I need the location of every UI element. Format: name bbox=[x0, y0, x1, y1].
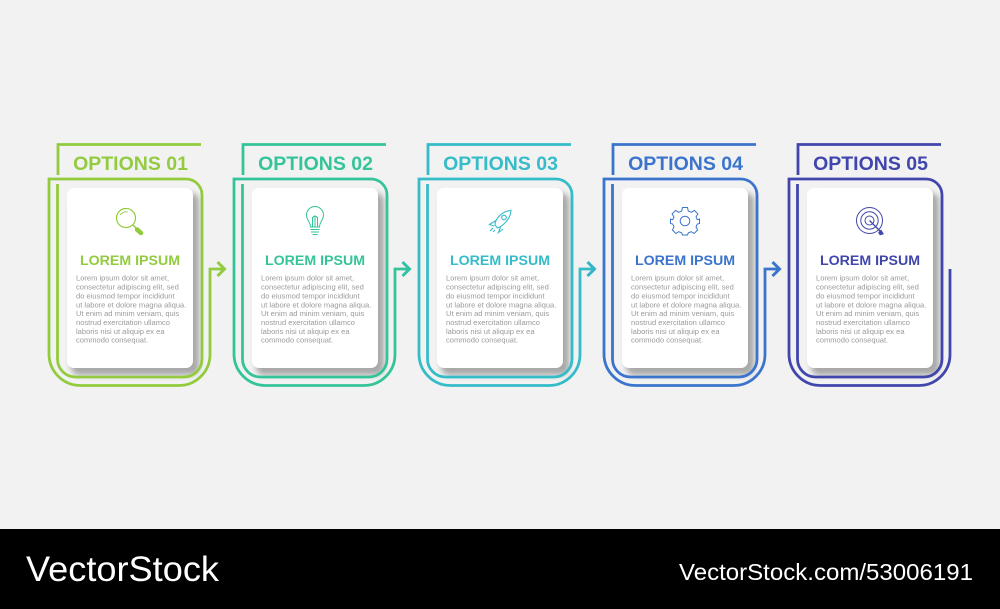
icon: gear bbox=[670, 208, 700, 235]
heading 01: OPTIONS 01 bbox=[73, 153, 188, 175]
card shadow 01 bbox=[71, 193, 199, 375]
body text 02: consectetur adipiscing elit, sed bbox=[261, 283, 364, 292]
bracket lines 02 bbox=[234, 144, 409, 386]
body text 04: ut labore et dolore magna aliqua. bbox=[631, 300, 741, 309]
footer bar bbox=[0, 529, 1000, 609]
footer logo text: VectorStock bbox=[26, 550, 220, 589]
card 03 bbox=[437, 188, 563, 368]
body text 05: consectetur adipiscing elit, sed bbox=[816, 283, 919, 292]
body text 04: do eiusmod tempor incididunt bbox=[631, 291, 730, 300]
subheading 04: LOREM IPSUM bbox=[635, 253, 735, 269]
heading 04: OPTIONS 04 bbox=[628, 153, 743, 175]
body text 01: ut labore et dolore magna aliqua. bbox=[76, 300, 186, 309]
body text 04: nostrud exercitation ullamco bbox=[631, 318, 725, 327]
arrow head 02 bbox=[402, 262, 410, 276]
body text 03: ut labore et dolore magna aliqua. bbox=[446, 300, 556, 309]
body text 02: Lorem ipsum dolor sit amet, bbox=[261, 274, 354, 283]
subheading 05: LOREM IPSUM bbox=[820, 253, 920, 269]
body text 03: laboris nisi ut aliquip ex ea bbox=[446, 327, 535, 336]
body text 04: consectetur adipiscing elit, sed bbox=[631, 283, 734, 292]
icon: rocket bbox=[490, 210, 511, 232]
body text 01: do eiusmod tempor incididunt bbox=[76, 291, 175, 300]
body text 01: commodo consequat. bbox=[76, 336, 148, 345]
arrow head 04 bbox=[772, 262, 780, 276]
body text 02: ut labore et dolore magna aliqua. bbox=[261, 300, 371, 309]
panel: options 01 bbox=[49, 144, 224, 386]
arrow head 03 bbox=[588, 262, 594, 276]
body text 01: laboris nisi ut aliquip ex ea bbox=[76, 327, 165, 336]
bracket lines 05 bbox=[789, 144, 950, 386]
body text 02: nostrud exercitation ullamco bbox=[261, 318, 355, 327]
body text 02: commodo consequat. bbox=[261, 336, 333, 345]
body text 03: commodo consequat. bbox=[446, 336, 518, 345]
subheading 03: LOREM IPSUM bbox=[450, 253, 550, 269]
card 05 bbox=[807, 188, 933, 368]
heading 05: OPTIONS 05 bbox=[813, 153, 928, 175]
card 01 bbox=[67, 188, 193, 368]
bracket lines 03 bbox=[419, 144, 594, 386]
body text 03: do eiusmod tempor incididunt bbox=[446, 291, 545, 300]
heading 02: OPTIONS 02 bbox=[258, 153, 373, 175]
card shadow 05 bbox=[811, 193, 939, 375]
body text 02: Ut enim ad minim veniam, quis bbox=[261, 309, 364, 318]
heading 03: OPTIONS 03 bbox=[443, 153, 558, 175]
card shadow 04 bbox=[626, 193, 754, 375]
panel: options 02 bbox=[234, 144, 410, 386]
subheading 01: LOREM IPSUM bbox=[80, 253, 180, 269]
card 02 bbox=[252, 188, 378, 368]
body text 04: commodo consequat. bbox=[631, 336, 703, 345]
icon: light bulb bbox=[306, 207, 324, 234]
body text 04: Lorem ipsum dolor sit amet, bbox=[631, 274, 724, 283]
panel: options 05 bbox=[789, 144, 950, 386]
icon: magnifier bbox=[116, 208, 141, 233]
icon: target bbox=[856, 208, 884, 235]
bracket lines 04 bbox=[604, 144, 779, 386]
body text 04: laboris nisi ut aliquip ex ea bbox=[631, 327, 720, 336]
body text 01: Lorem ipsum dolor sit amet, bbox=[76, 274, 169, 283]
body text 05: nostrud exercitation ullamco bbox=[816, 318, 910, 327]
body text 03: nostrud exercitation ullamco bbox=[446, 318, 540, 327]
body text 03: consectetur adipiscing elit, sed bbox=[446, 283, 549, 292]
body text 02: do eiusmod tempor incididunt bbox=[261, 291, 360, 300]
arrow head 01 bbox=[218, 262, 224, 276]
card shadow 02 bbox=[256, 193, 384, 375]
body text 05: laboris nisi ut aliquip ex ea bbox=[816, 327, 905, 336]
body text 01: consectetur adipiscing elit, sed bbox=[76, 283, 179, 292]
body text 03: Ut enim ad minim veniam, quis bbox=[446, 309, 549, 318]
panel: options 04 bbox=[604, 144, 780, 386]
body text 01: nostrud exercitation ullamco bbox=[76, 318, 170, 327]
panel: options 03 bbox=[419, 144, 594, 386]
body text 04: Ut enim ad minim veniam, quis bbox=[631, 309, 734, 318]
body text 03: Lorem ipsum dolor sit amet, bbox=[446, 274, 539, 283]
body text 05: Ut enim ad minim veniam, quis bbox=[816, 309, 919, 318]
body text 05: ut labore et dolore magna aliqua. bbox=[816, 300, 926, 309]
body text 05: Lorem ipsum dolor sit amet, bbox=[816, 274, 909, 283]
body text 05: commodo consequat. bbox=[816, 336, 888, 345]
footer url text: VectorStock.com/53006191 bbox=[679, 559, 973, 585]
bracket lines 01 bbox=[49, 144, 224, 386]
body text 01: Ut enim ad minim veniam, quis bbox=[76, 309, 179, 318]
card 04 bbox=[622, 188, 748, 368]
body text 05: do eiusmod tempor incididunt bbox=[816, 291, 915, 300]
body text 02: laboris nisi ut aliquip ex ea bbox=[261, 327, 350, 336]
subheading 02: LOREM IPSUM bbox=[265, 253, 365, 269]
card shadow 03 bbox=[441, 193, 569, 375]
